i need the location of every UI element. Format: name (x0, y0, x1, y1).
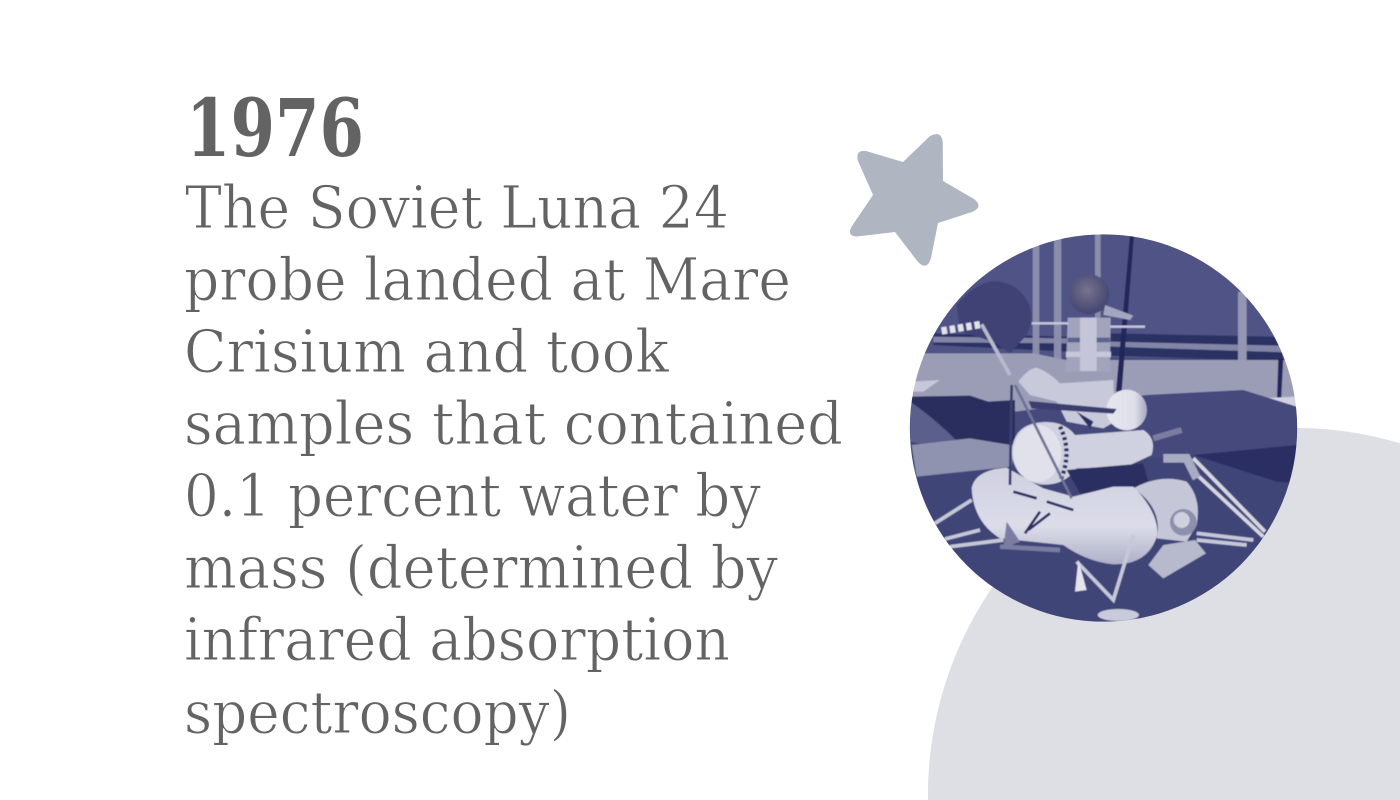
footpad (1098, 609, 1139, 621)
top sphere and ascent stage (1032, 274, 1145, 372)
body text: probe landed at Mare (184, 245, 791, 314)
photo backdrop (910, 234, 1298, 622)
body text: samples that contained (184, 389, 843, 458)
support struts over tanks (1010, 385, 1072, 498)
lander legs (935, 458, 1265, 600)
background circle (928, 428, 1400, 800)
body text: infrared absorption (184, 605, 730, 674)
body text: mass (determined by (184, 533, 779, 602)
mid cylinder tank (1012, 422, 1182, 485)
year heading: 1976 (186, 81, 364, 175)
striped cone (1075, 560, 1087, 592)
upper tanks (1018, 368, 1147, 430)
body text: spectroscopy) (184, 678, 571, 747)
body text: Crisium and took (184, 317, 670, 386)
photo: Luna 24 lander (910, 234, 1298, 622)
body text: The Soviet Luna 24 (185, 173, 729, 242)
lower tanks (972, 463, 1206, 578)
star (850, 134, 979, 266)
striped antenna arm (942, 324, 1010, 375)
body text (184, 173, 843, 747)
body text: 0.1 percent water by (184, 461, 762, 530)
